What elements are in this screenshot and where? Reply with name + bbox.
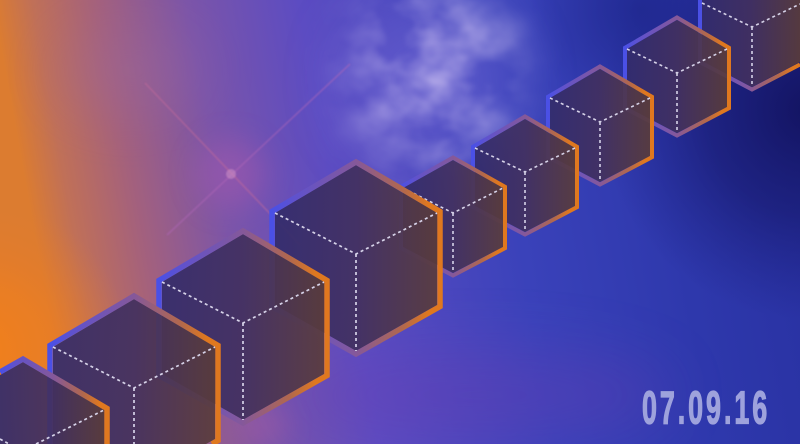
cube 9: top right: [700, 0, 800, 90]
cube 7: [548, 66, 652, 184]
cube 3: [159, 231, 327, 423]
cube 6: [473, 116, 577, 234]
star flare: [145, 64, 350, 245]
cube 4: largest centre: [272, 162, 440, 354]
cube 8: [625, 18, 729, 136]
cube 2: [50, 296, 218, 444]
cube 1: bottom left: [0, 359, 107, 444]
date label: 07.09.16: [642, 382, 770, 433]
cube 5: [401, 158, 505, 276]
